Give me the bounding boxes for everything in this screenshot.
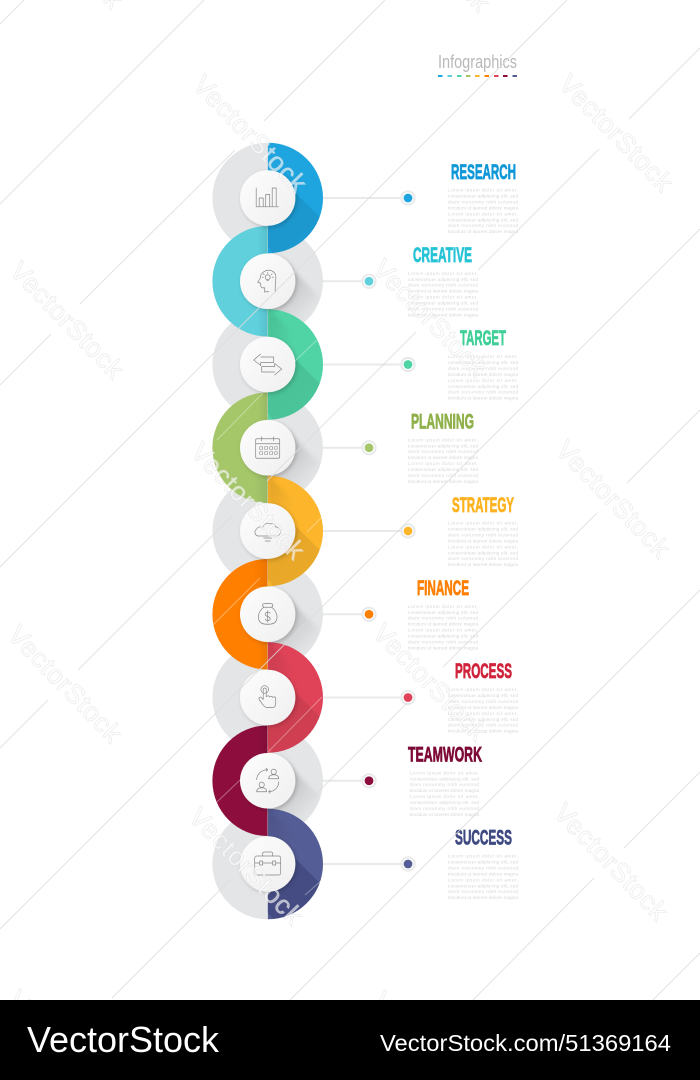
label: teamwork: Lorem ipsum dolor sit amet, bbox=[410, 794, 479, 799]
label: teamwork bbox=[408, 744, 482, 817]
label: research: RESEARCH bbox=[451, 161, 516, 184]
label: target: Lorem ipsum dolor sit amet, bbox=[448, 354, 518, 359]
footer bar: VectorStock bbox=[27, 1019, 220, 1060]
label: finance: FINANCE bbox=[417, 577, 469, 600]
label: planning bbox=[408, 410, 478, 484]
footer bar: VectorStock.com/51369164 bbox=[380, 1030, 671, 1056]
label: strategy: diam nonummy nibh euismod bbox=[448, 556, 518, 561]
label: target: diam nonummy nibh euismod bbox=[448, 390, 518, 395]
label: planning: consectetuer adipiscing elit, sed bbox=[408, 443, 478, 448]
band: finance (orange) bbox=[212, 558, 268, 670]
band: research (blue) bbox=[268, 142, 323, 254]
label: process: consectetuer adipiscing elit, sed bbox=[448, 717, 518, 722]
label: success: consectetuer adipiscing elit, sed bbox=[448, 860, 518, 864]
label: planning: consectetuer adipiscing elit, sed bbox=[408, 467, 478, 472]
label: creative: diam nonummy nibh euismod bbox=[408, 283, 478, 288]
label: strategy: tincidunt ut laoreet dolore magna bbox=[448, 562, 518, 567]
label: strategy: tincidunt ut laoreet dolore magna bbox=[448, 538, 518, 543]
VectorStock watermarks: VectorStock bbox=[367, 618, 493, 747]
label: strategy: consectetuer adipiscing elit, sed bbox=[448, 550, 518, 555]
label: creative: consectetuer adipiscing elit, sed bbox=[408, 301, 478, 306]
label: planning: tincidunt ut laoreet dolore magna bbox=[408, 455, 478, 460]
band: strategy (yellow) bbox=[268, 476, 323, 586]
label: success: consectetuer adipiscing elit, sed bbox=[448, 883, 518, 888]
label: strategy: diam nonummy nibh euismod bbox=[448, 532, 518, 537]
label: research: diam nonummy nibh euismod bbox=[448, 223, 518, 228]
label: success: Lorem ipsum dolor sit amet, bbox=[448, 854, 518, 858]
label: finance: consectetuer adipiscing elit, sed bbox=[408, 634, 478, 639]
label: success: Lorem ipsum dolor sit amet, bbox=[448, 877, 518, 882]
label: target: diam nonummy nibh euismod bbox=[448, 366, 518, 371]
knob icon: pointing hand bbox=[240, 670, 295, 725]
label: strategy bbox=[448, 494, 518, 567]
grey backing discs bbox=[212, 143, 323, 919]
connector lines and dots bbox=[320, 191, 415, 871]
coloured half discs bbox=[212, 142, 323, 920]
VectorStock watermarks: VectorStock bbox=[548, 798, 674, 927]
label: success: diam nonummy nibh euismod bbox=[448, 889, 518, 894]
label: research: tincidunt ut laoreet dolore magna bbox=[448, 229, 518, 234]
label: success: diam nonummy nibh euismod bbox=[448, 865, 518, 870]
knob icon: money bag bbox=[240, 587, 295, 642]
knob icon: bar chart bbox=[240, 170, 295, 226]
label: research: consectetuer adipiscing elit, sed bbox=[448, 217, 518, 222]
label: teamwork: consectetuer adipiscing elit, sed bbox=[410, 776, 479, 781]
label: strategy: STRATEGY bbox=[452, 494, 514, 517]
label: target: consectetuer adipiscing elit, sed bbox=[448, 360, 518, 365]
label: process: Lorem ipsum dolor sit amet, bbox=[448, 687, 518, 692]
band: creative (cyan) bbox=[212, 225, 268, 337]
label: teamwork: consectetuer adipiscing elit, sed bbox=[410, 800, 479, 805]
label: planning: diam nonummy nibh euismod bbox=[408, 473, 478, 478]
label: process: diam nonummy nibh euismod bbox=[448, 723, 518, 728]
band: target (green) bbox=[268, 309, 323, 420]
label: creative: CREATIVE bbox=[413, 244, 472, 267]
white knobs with line icons bbox=[240, 170, 295, 892]
label: research: diam nonummy nibh euismod bbox=[448, 199, 518, 204]
label: target bbox=[448, 327, 518, 401]
header: Infographics: Infographics bbox=[438, 51, 517, 72]
label: teamwork: tincidunt ut laoreet dolore magna bbox=[410, 788, 479, 793]
label: finance: Lorem ipsum dolor sit amet, bbox=[408, 604, 478, 609]
label: teamwork: TEAMWORK bbox=[408, 744, 482, 766]
label: process: Lorem ipsum dolor sit amet, bbox=[448, 711, 518, 716]
label: process: tincidunt ut laoreet dolore magna bbox=[448, 705, 518, 710]
label: finance: consectetuer adipiscing elit, sed bbox=[408, 610, 478, 615]
VectorStock watermarks: VectorStock bbox=[553, 69, 679, 198]
label: research: consectetuer adipiscing elit, sed bbox=[448, 194, 518, 198]
label: creative bbox=[408, 244, 478, 317]
label: strategy: consectetuer adipiscing elit, sed bbox=[448, 526, 518, 532]
label: success: SUCCESS bbox=[455, 826, 512, 850]
footer bar bbox=[0, 1000, 700, 1080]
label: teamwork: diam nonummy nibh euismod bbox=[410, 782, 479, 787]
label: planning: diam nonummy nibh euismod bbox=[408, 449, 478, 454]
label: process: consectetuer adipiscing elit, sed bbox=[448, 693, 518, 698]
VectorStock watermarks: VectorStock bbox=[4, 256, 130, 385]
label: finance bbox=[408, 577, 478, 650]
knob icon: two-way arrows bbox=[240, 337, 295, 392]
label: finance: tincidunt ut laoreet dolore magna bbox=[408, 622, 478, 627]
label: process bbox=[448, 660, 518, 734]
label: target: tincidunt ut laoreet dolore magna bbox=[448, 396, 518, 401]
label: research bbox=[448, 161, 518, 234]
label: target: Lorem ipsum dolor sit amet, bbox=[448, 378, 518, 383]
knob icon: calendar bbox=[240, 420, 295, 475]
label: finance: diam nonummy nibh euismod bbox=[408, 616, 478, 621]
label: success bbox=[448, 826, 518, 900]
label: target: tincidunt ut laoreet dolore magna bbox=[448, 372, 518, 377]
band: success (indigo) bbox=[268, 808, 323, 920]
label: research: tincidunt ut laoreet dolore magna bbox=[448, 205, 518, 210]
label: strategy: Lorem ipsum dolor sit amet, bbox=[448, 544, 518, 549]
label: target: consectetuer adipiscing elit, sed bbox=[448, 384, 518, 389]
label: target: TARGET bbox=[460, 327, 506, 350]
VectorStock watermarks: VectorStock bbox=[183, 802, 309, 931]
label: planning: tincidunt ut laoreet dolore magna bbox=[408, 479, 478, 484]
label: creative: Lorem ipsum dolor sit amet, bbox=[408, 295, 478, 300]
VectorStock watermarks: VectorStock bbox=[185, 437, 311, 566]
label: finance: Lorem ipsum dolor sit amet, bbox=[408, 628, 478, 633]
label: planning: Lorem ipsum dolor sit amet, bbox=[408, 437, 478, 442]
VectorStock watermarks: VectorStock bbox=[2, 620, 128, 749]
VectorStock watermarks: VectorStock bbox=[367, 254, 493, 383]
label: process: tincidunt ut laoreet dolore magna bbox=[448, 729, 518, 734]
knob shadows on grey discs bbox=[268, 268, 314, 816]
label: success: tincidunt ut laoreet dolore magna bbox=[448, 895, 518, 900]
VectorStock watermarks: VectorStock bbox=[187, 70, 313, 199]
label: creative: tincidunt ut laoreet dolore magna bbox=[408, 312, 478, 317]
label: creative: diam nonummy nibh euismod bbox=[408, 306, 478, 311]
label: success: tincidunt ut laoreet dolore magna bbox=[448, 871, 518, 876]
knob icon: briefcase bbox=[240, 836, 295, 892]
label: planning: Lorem ipsum dolor sit amet, bbox=[408, 461, 478, 466]
label: finance: tincidunt ut laoreet dolore magna bbox=[408, 645, 478, 650]
label: process: diam nonummy nibh euismod bbox=[448, 699, 518, 704]
label: process: PROCESS bbox=[455, 660, 512, 683]
label: teamwork: Lorem ipsum dolor sit amet, bbox=[410, 770, 479, 775]
label: teamwork: tincidunt ut laoreet dolore magna bbox=[410, 812, 479, 817]
band: teamwork (maroon) bbox=[212, 725, 268, 837]
label: creative: tincidunt ut laoreet dolore magna bbox=[408, 289, 478, 294]
label: planning: PLANNING bbox=[411, 410, 474, 434]
label: creative: Lorem ipsum dolor sit amet, bbox=[408, 271, 478, 276]
header: Infographics bbox=[438, 51, 517, 77]
label: creative: consectetuer adipiscing elit, sed bbox=[408, 277, 478, 282]
band: process (red) bbox=[268, 642, 323, 753]
knob icon: head with lightbulb bbox=[240, 254, 295, 309]
label: finance: diam nonummy nibh euismod bbox=[408, 639, 478, 644]
label: strategy: Lorem ipsum dolor sit amet, bbox=[448, 520, 518, 526]
band: planning (olive) bbox=[212, 392, 268, 504]
label: research: Lorem ipsum dolor sit amet, bbox=[448, 211, 518, 216]
label: research: Lorem ipsum dolor sit amet, bbox=[448, 188, 518, 192]
knob icon: cloud bbox=[240, 503, 295, 559]
VectorStock watermarks: VectorStock bbox=[550, 435, 676, 564]
knob icon: people exchange bbox=[240, 753, 295, 808]
label: teamwork: diam nonummy nibh euismod bbox=[410, 806, 479, 811]
